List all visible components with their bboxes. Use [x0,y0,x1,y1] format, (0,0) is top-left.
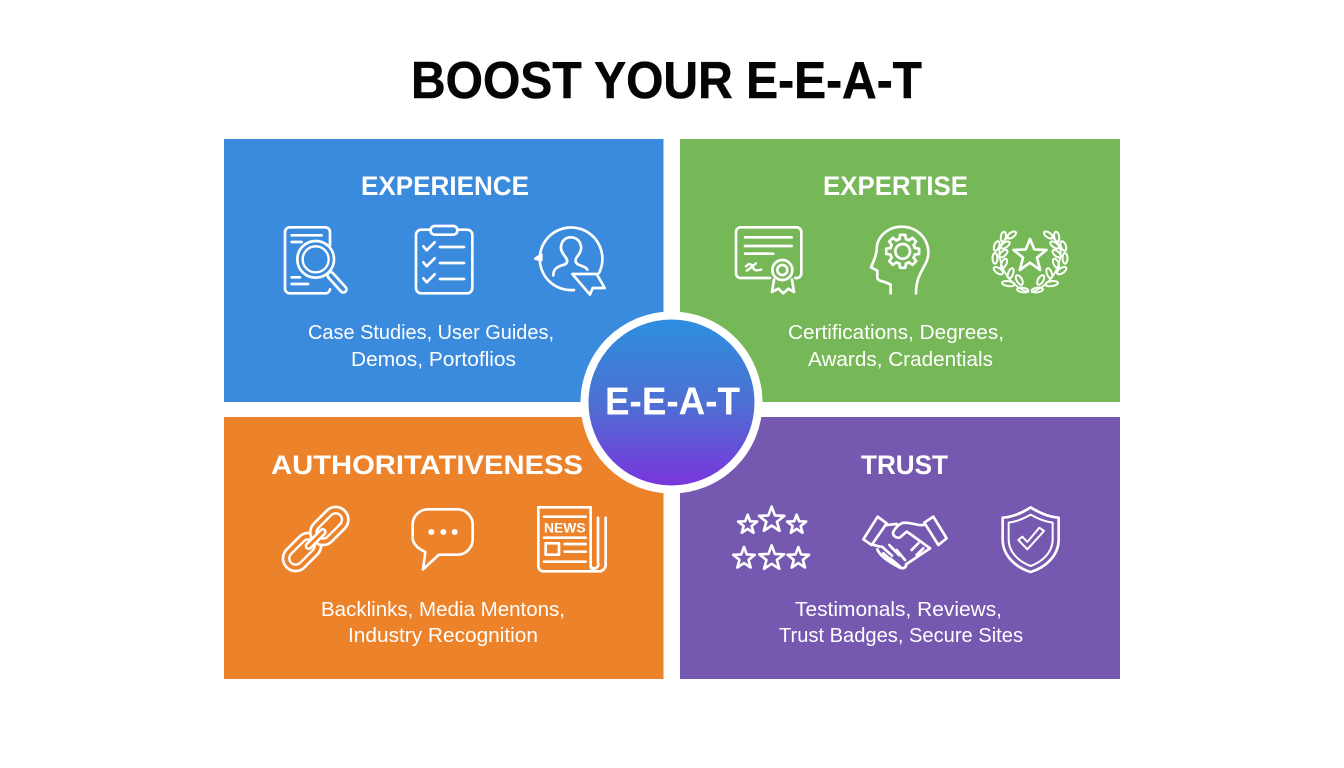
icon: speech bubble [413,509,473,569]
heading: trust: TRUST [861,450,948,480]
icons: trust [733,507,1059,572]
text: experience examples: Case Studies, User Guides, [308,321,554,344]
icon: head with gear [871,227,928,293]
icons: authoritativeness [278,502,606,576]
icon: handshake [863,517,947,568]
icon: chain link [278,502,354,576]
title: BOOST YOUR E-E-A-T [411,52,922,110]
icon: user cycle [535,227,605,295]
heading: authoritativeness: AUTHORITATIVENESS [271,450,583,480]
text: trust examples [779,598,1023,647]
icon: newspaper: NEWS [544,520,586,536]
icon: certificate [736,227,801,293]
text: experience examples: Demos, Portoflios [351,348,516,371]
text: trust examples: Testimonals, Reviews, [795,598,1002,621]
text: authoritativeness examples: Backlinks, Media Mentons, [321,598,565,621]
center badge: E-E-A-T [584,316,758,490]
icon: document search [285,227,343,293]
text: expertise examples [788,321,1004,371]
icon: shield check [1003,507,1059,572]
icons: expertise [736,227,1068,293]
icons: experience [285,226,605,295]
heading: experience: EXPERIENCE [361,171,529,201]
panel: authoritativeness [224,417,664,679]
text: authoritativeness examples: Industry Recognition [348,624,538,647]
panel: expertise [680,139,1120,402]
icon: rating stars [733,507,809,569]
text: expertise examples: Certifications, Degrees, [788,321,1004,344]
text: authoritativeness examples [321,598,565,647]
text: experience examples [308,321,554,371]
text: expertise examples: Awards, Cradentials [808,348,993,371]
icon: newspaper [538,507,606,571]
panel: experience [224,139,664,402]
panel: trust [680,417,1120,679]
text: trust examples: Trust Badges, Secure Sites [779,624,1023,647]
icon: checklist clipboard [416,226,472,293]
center badge: E-E-A-T: E-E-A-T [605,380,740,424]
heading: expertise: EXPERTISE [823,171,968,201]
icon: laurel star [992,230,1068,293]
